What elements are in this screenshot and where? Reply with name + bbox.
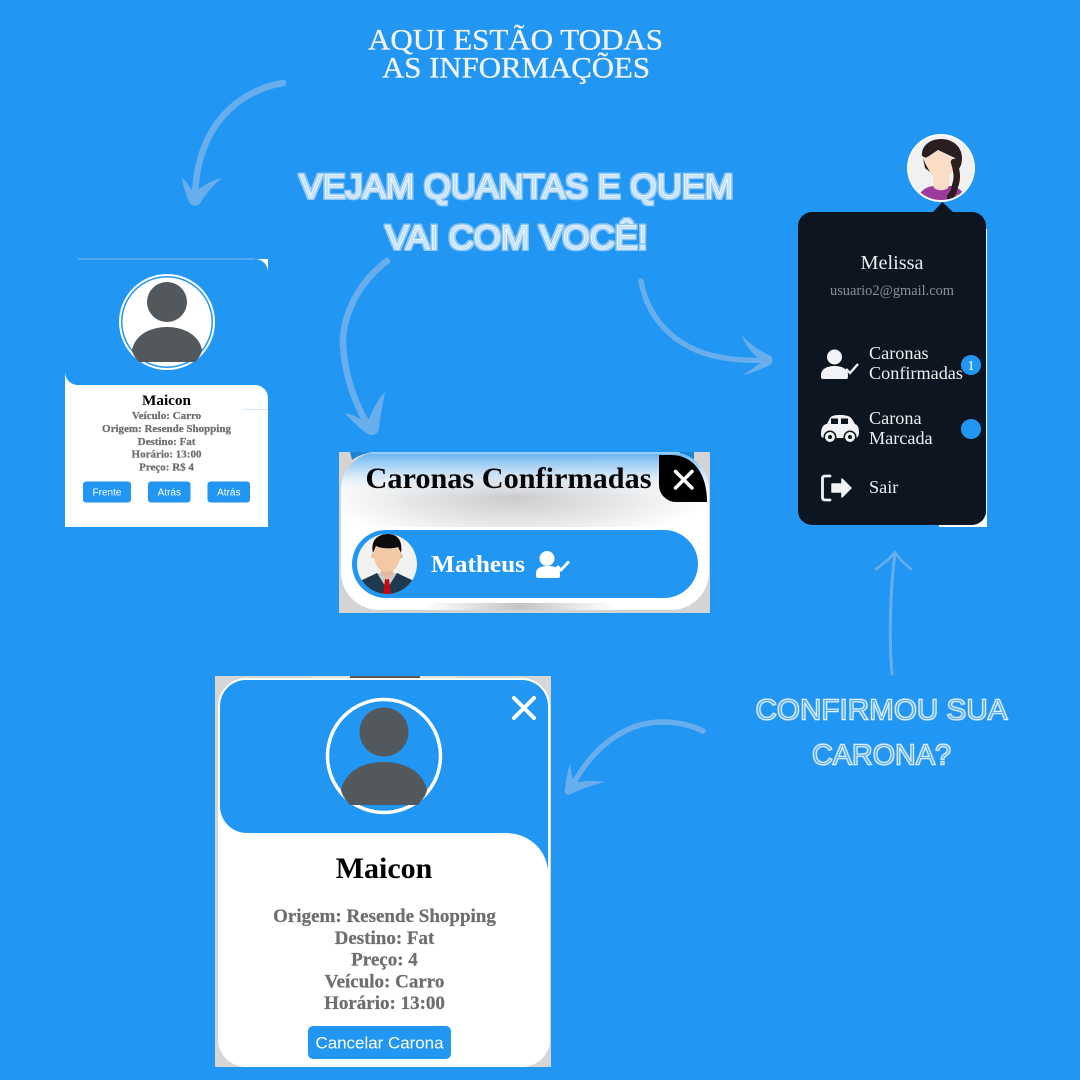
passenger row [352, 530, 698, 598]
badge: count [961, 355, 981, 375]
heading: vejam quantas e quem: VEJAM QUANTAS E QUEM [300, 168, 734, 206]
driver details [102, 410, 231, 474]
arrow: question to ride card [565, 722, 703, 795]
button: cancelar carona [308, 1026, 451, 1059]
driver name: Maicon [336, 852, 433, 885]
menu item: caronas confirmadas: Confirmadas [869, 363, 963, 383]
button: atras 2: Atrás [217, 488, 240, 498]
driver details: Origem: Resende Shopping [102, 423, 231, 435]
ride details: Destino: Fat [335, 928, 435, 949]
arrow: heading to confirmed rides [343, 261, 387, 435]
user avatar [907, 134, 975, 204]
menu item: caronas confirmadas [821, 343, 981, 383]
button: atras: Atrás [158, 488, 181, 498]
menu item: sair: Sair [869, 477, 898, 497]
avatar [328, 700, 440, 812]
avatar [119, 274, 215, 370]
heading: vejam quantas e quem: VAI COM VOCÊ! [386, 219, 648, 257]
button: atras [148, 482, 190, 502]
button: atras 2 [208, 482, 250, 502]
arrow: title to profile card [182, 83, 283, 206]
user name: Melissa [860, 252, 924, 274]
passenger avatar [357, 534, 417, 596]
close button [659, 455, 707, 502]
ride details [273, 906, 496, 1014]
arrow: heading to menu [641, 281, 772, 375]
arrow: question to menu [876, 552, 911, 674]
ride details: Horário: 13:00 [324, 993, 445, 1014]
panel: confirmed rides [325, 452, 710, 613]
user email: usuario2@gmail.com [830, 283, 954, 299]
menu item: carona marcada [821, 408, 981, 448]
driver details: Destino: Fat [138, 436, 196, 448]
driver details: Veículo: Carro [132, 410, 202, 422]
header blue [220, 680, 548, 870]
ride details: Preço: 4 [351, 950, 418, 970]
button: frente [83, 482, 131, 502]
menu item: carona marcada: Marcada [869, 428, 933, 448]
passenger name: Matheus [431, 552, 525, 578]
badge: count: 1 [968, 359, 974, 374]
menu item: caronas confirmadas: Caronas [869, 343, 929, 363]
ride details: Veículo: Carro [325, 972, 444, 992]
title: AS INFORMAÇÕES [382, 52, 650, 84]
heading: confirmou sua carona [756, 694, 1008, 772]
driver name: Maicon [142, 392, 192, 409]
badge: dot [961, 419, 981, 439]
header blue [65, 259, 268, 385]
panel: driver card small [65, 259, 268, 527]
button: cancelar carona: Cancelar Carona [316, 1034, 444, 1052]
menu item: sair [822, 476, 898, 500]
heading: confirmou sua carona: CARONA? [812, 740, 951, 772]
button: frente: Frente [93, 488, 122, 498]
ride details: Origem: Resende Shopping [273, 906, 496, 927]
heading: confirmou sua carona: CONFIRMOU SUA [756, 694, 1008, 726]
title: AQUI ESTÃO TODAS [368, 24, 663, 56]
panel: user menu [798, 134, 987, 527]
menu item: carona marcada: Carona [869, 408, 922, 428]
close icon [514, 698, 534, 718]
icon: user check [536, 551, 569, 578]
title [368, 24, 663, 84]
heading: vejam quantas e quem [300, 168, 734, 257]
driver details: Preço: R$ 4 [139, 462, 194, 474]
panel title: Caronas Confirmadas [366, 462, 652, 495]
driver details: Horário: 13:00 [132, 448, 202, 460]
panel: booked ride card [215, 676, 551, 1067]
